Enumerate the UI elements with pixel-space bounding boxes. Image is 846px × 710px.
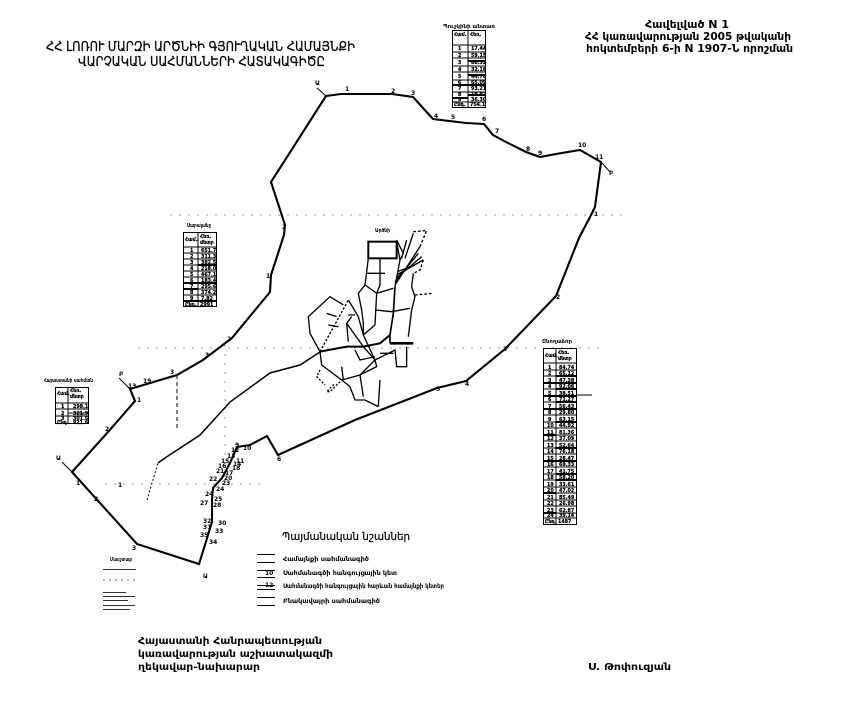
boundary point labels southwest: 22: [209, 476, 217, 483]
table: north neighbour: 2: [458, 53, 461, 59]
table: north neighbour: 6: [458, 80, 462, 86]
table: east neighbour: 39.14: [559, 513, 575, 519]
table: north neighbour: Հեռ.: [470, 32, 481, 38]
table: north neighbour: 7: [458, 86, 461, 92]
table: east neighbour: 1: [548, 365, 551, 371]
table: east neighbour: Շնողաձոր: [542, 339, 572, 345]
boundary point labels north: 2: [391, 88, 395, 95]
signatory title: [138, 636, 333, 673]
table: southwest neighbour: [44, 378, 93, 426]
boundary point labels north: 5: [451, 114, 455, 121]
signatory title: կառավարության աշխատակազմի: [138, 649, 333, 660]
table: east neighbour: [542, 339, 592, 525]
table: west neighbour: Սարալանջ: [187, 223, 211, 229]
table: north neighbour: 3: [458, 60, 461, 66]
boundary point labels southwest: 14: [233, 461, 241, 468]
table: north neighbour: 9: [458, 97, 462, 103]
boundary point labels southwest: 21: [216, 468, 224, 475]
table: east neighbour: 81.36: [559, 430, 575, 436]
table: east neighbour: 33.61: [559, 482, 574, 488]
boundary point labels north: 2: [556, 294, 560, 301]
table: north neighbour: 32.18: [471, 67, 487, 73]
boundary point labels southwest: 33: [215, 528, 223, 535]
boundary point labels north: 9: [538, 150, 542, 157]
boundary point labels southwest: 10: [243, 445, 251, 452]
table: east neighbour: 41.75: [559, 469, 574, 475]
community boundary: [72, 94, 601, 564]
boundary point labels southwest: 23: [222, 480, 230, 487]
table: east neighbour: 44.92: [559, 423, 574, 429]
boundary point labels north: 4: [434, 113, 438, 120]
table: east neighbour: 10: [547, 423, 554, 429]
table: north neighbour: Ընդ.: [454, 102, 466, 108]
boundary point labels southwest: 1: [76, 480, 80, 487]
table: southwest neighbour: Հայաստանի սահման: [44, 378, 93, 384]
table: north neighbour: 93.21: [471, 86, 486, 92]
table: southwest neighbour: 298.1: [73, 404, 88, 410]
table: east neighbour: 1487: [558, 519, 571, 525]
annex note: ՀՀ կառավարության 2005 թվականի: [585, 31, 791, 43]
annex note: Հավելված N 1: [645, 19, 729, 31]
boundary point labels north: 10: [578, 142, 586, 149]
table: west neighbour: 7.82: [201, 296, 213, 302]
table: north neighbour: Պուշկինի անտառ: [443, 24, 495, 30]
boundary point labels southwest: 11: [236, 458, 244, 465]
table: west neighbour: 183.4: [201, 278, 217, 284]
table: north neighbour: 36.30: [471, 97, 487, 103]
boundary point labels southwest: 13: [227, 453, 235, 460]
table: east neighbour: 22: [547, 501, 554, 507]
table: north neighbour: [443, 24, 495, 108]
table: west neighbour: 2991: [200, 302, 213, 308]
table: east neighbour: 14: [547, 449, 554, 455]
table: east neighbour: 47.02: [559, 488, 574, 494]
signatory title: ղեկավար-նախարար: [138, 662, 260, 673]
legend: 10: [265, 570, 273, 577]
signatory name: Ս. Թոփուզյան: [588, 662, 671, 673]
table: southwest neighbour: 1: [61, 404, 64, 410]
table: east neighbour: 16: [547, 462, 554, 468]
boundary point labels north: 3: [503, 346, 507, 353]
table: east neighbour: 12: [547, 436, 554, 442]
table: west neighbour: 374.2: [201, 290, 216, 296]
table: west neighbour: 1: [190, 248, 193, 254]
boundary point labels north: 1: [266, 273, 270, 280]
boundary point labels north: 6: [277, 456, 281, 463]
table: west neighbour: 8: [190, 290, 194, 296]
table: west neighbour: Ընդ.: [185, 302, 197, 308]
table: east neighbour: 2: [548, 371, 551, 377]
table: west neighbour: Հեռ.: [200, 234, 211, 240]
boundary point labels north: 7: [495, 128, 499, 135]
boundary point labels southwest: [56, 371, 251, 580]
table: west neighbour: [183, 223, 217, 308]
table: east neighbour: 15: [547, 456, 554, 462]
table: west neighbour: Համ.: [185, 237, 198, 243]
boundary point labels north: 5: [436, 386, 440, 393]
small scale key: Մասշտաբ: [110, 557, 132, 563]
boundary point labels southwest: 30: [218, 520, 226, 527]
table: east neighbour: 52.64: [559, 443, 575, 449]
graticule lines: [105, 215, 625, 485]
table: north neighbour: 754.1: [470, 102, 485, 108]
title: ՎԱՐՉԱԿԱՆ ՍԱՀՄԱՆՆԵՐԻ ՀԱՏԱԿԱԳԻԾԸ: [78, 55, 325, 70]
table: east neighbour: 11: [547, 430, 554, 436]
table: southwest neighbour: 921.6: [73, 420, 89, 426]
annex note: հոկտեմբերի 6-ի N 1907-Ն որոշման: [586, 43, 793, 55]
table: west neighbour: 311.3: [201, 254, 216, 260]
table: east neighbour: 9: [548, 417, 552, 423]
boundary point labels southwest: 19: [143, 378, 151, 385]
table: west neighbour: 467.1: [201, 272, 216, 278]
boundary point labels southwest: Ա: [203, 573, 208, 580]
boundary point labels north: 3: [411, 90, 415, 97]
table: north neighbour: 4: [458, 67, 462, 73]
table: east neighbour: 63.15: [559, 417, 574, 423]
boundary point labels southwest: 34: [209, 539, 217, 546]
legend: Բնակավայրի սահմանագիծ: [283, 597, 380, 605]
boundary point labels north: 3: [205, 352, 209, 359]
table: north neighbour: 17.44: [471, 46, 487, 52]
boundary point labels southwest: 31: [203, 524, 211, 531]
boundary point labels southwest: 28: [213, 502, 221, 509]
table: east neighbour: 76.18: [559, 449, 575, 455]
table: east neighbour: 71.27: [559, 397, 574, 403]
boundary point labels southwest: 1: [137, 397, 141, 404]
table: east neighbour: 69.33: [559, 462, 574, 468]
boundary point labels southwest: 25: [214, 496, 222, 503]
table: east neighbour: 7: [548, 404, 551, 410]
signatory title: Հայաստանի Հանրապետության: [138, 636, 322, 647]
boundary point labels southwest: 32: [203, 518, 211, 525]
annex note: [585, 19, 793, 55]
boundary point labels north: 6: [482, 116, 486, 123]
table: north neighbour: 1: [458, 46, 461, 52]
boundary point labels southwest: 24: [205, 491, 213, 498]
boundary point labels southwest: 2: [94, 496, 98, 503]
boundary point labels southwest: 20: [224, 475, 232, 482]
table: southwest neighbour: 321.9: [73, 411, 89, 417]
table: north neighbour: Համ.: [454, 32, 467, 38]
legend: 12: [265, 582, 273, 589]
boundary point labels north: 2: [282, 224, 286, 231]
table: east neighbour: 38.51: [559, 391, 574, 397]
table: east neighbour: 4: [548, 384, 552, 390]
settlement network: [308, 231, 433, 407]
table: east neighbour: 18: [547, 475, 554, 481]
boundary point labels north: Բ: [609, 170, 613, 177]
table: east neighbour: 56.43: [559, 404, 574, 410]
table: east neighbour: 5: [548, 391, 551, 397]
title: [46, 40, 355, 70]
table: east neighbour: 28.47: [559, 456, 574, 462]
table: southwest neighbour: մետր: [70, 394, 84, 400]
table: southwest neighbour: Համ.: [57, 391, 70, 397]
table: southwest neighbour: Հեռ.: [70, 388, 81, 394]
table: west neighbour: 9: [190, 296, 194, 302]
table: west neighbour: 295.6: [201, 284, 217, 290]
table: east neighbour: 21: [547, 495, 554, 501]
table: north neighbour: 59.15: [471, 53, 486, 59]
boundary point labels north: 2: [227, 336, 231, 343]
table: east neighbour: 65.12: [559, 371, 574, 377]
table: west neighbour: 6: [190, 278, 194, 284]
table: east neighbour: 19: [547, 482, 554, 488]
table: east neighbour: 6: [548, 397, 552, 403]
table: southwest neighbour: 3: [61, 416, 64, 422]
table: east neighbour: 62.87: [559, 508, 574, 514]
table: west neighbour: 3: [190, 260, 193, 266]
table: east neighbour: մետր: [558, 356, 572, 362]
boundary point labels southwest: 18: [232, 465, 240, 472]
title: ՀՀ ԼՈՌՈՒ ՄԱՐԶԻ ԱՐԾՆԻԻ ԳՅՈՒՂԱԿԱՆ ՀԱՄԱՅՆՔԻ: [46, 40, 355, 55]
boundary point labels north: 4: [465, 381, 469, 388]
table: west neighbour: մետր: [200, 240, 214, 246]
settlement label: Արծնի: [375, 228, 390, 234]
boundary point labels southwest: 16: [218, 463, 226, 470]
table: east neighbour: 26.98: [559, 501, 575, 507]
boundary point labels north: 1: [345, 86, 349, 93]
boundary point labels north: 8: [526, 146, 530, 153]
boundary point labels north: 11: [595, 154, 603, 161]
boundary point labels southwest: 12: [231, 447, 239, 454]
table: east neighbour: 58.20: [559, 475, 575, 481]
table: north neighbour: 5: [458, 74, 461, 80]
boundary point labels north: 1: [594, 211, 598, 218]
table: east neighbour: 24: [547, 513, 554, 519]
table: east neighbour: 13: [547, 443, 554, 449]
table: west neighbour: 5: [190, 272, 193, 278]
boundary point labels southwest: 24: [216, 486, 224, 493]
boundary point labels southwest: 3: [132, 545, 136, 552]
table: west neighbour: 2: [190, 254, 193, 260]
boundary point labels southwest: Ա: [56, 455, 61, 462]
table: east neighbour: 20: [547, 488, 554, 494]
table: east neighbour: 85.49: [559, 495, 575, 501]
table: east neighbour: 3: [548, 378, 551, 384]
table: east neighbour: Հեռ.: [558, 350, 569, 356]
internal road: [147, 352, 320, 500]
table: east neighbour: 92.06: [559, 384, 575, 390]
boundary point labels north: Ա: [315, 80, 320, 87]
legend: Պայմանական նշաններ: [282, 531, 410, 543]
table: east neighbour: Ընդ.: [545, 519, 557, 525]
table: southwest neighbour: Ընդ.: [57, 420, 69, 426]
table: east neighbour: 23: [547, 508, 554, 514]
boundary point labels southwest: 27: [200, 500, 208, 507]
legend: Սահմանագծի հանգույցային հարևան համայնքի կետեր: [283, 582, 444, 590]
boundary point labels north: [170, 80, 613, 463]
table: east neighbour: 29.80: [559, 410, 575, 416]
table: southwest neighbour: 301.5: [73, 416, 88, 422]
table: west neighbour: 651.7: [201, 248, 216, 254]
small scale key: [103, 557, 136, 610]
boundary point labels southwest: 2: [105, 426, 109, 433]
table: east neighbour: 47.38: [559, 378, 575, 384]
table: north neighbour: 18.87: [471, 92, 486, 98]
boundary point labels southwest: 13: [128, 383, 136, 390]
table: east neighbour: 8: [548, 410, 552, 416]
table: west neighbour: 7: [190, 284, 193, 290]
table: east neighbour: 17: [547, 469, 554, 475]
table: west neighbour: 4: [190, 266, 194, 272]
table: southwest neighbour: 2: [61, 411, 64, 417]
boundary point labels southwest: 1: [118, 482, 122, 489]
boundary point labels southwest: 35: [200, 532, 208, 539]
table: east neighbour: 84.74: [559, 365, 575, 371]
table: east neighbour: 37.09: [559, 436, 575, 442]
table: west neighbour: 218.0: [201, 266, 217, 272]
boundary point labels southwest: 15: [221, 458, 229, 465]
table: north neighbour: 8: [458, 92, 462, 98]
legend: Սահմանագծի հանգույցային կետ: [283, 569, 397, 577]
boundary point labels southwest: Բ: [119, 371, 123, 378]
boundary point labels southwest: 9: [235, 442, 239, 449]
legend: [257, 531, 444, 606]
table: west neighbour: 382.5: [201, 260, 216, 266]
table: north neighbour: 88.32: [471, 60, 486, 66]
legend: Համայնքի սահմանագիծ: [283, 555, 369, 563]
boundary point labels southwest: 17: [225, 470, 233, 477]
table: east neighbour: Համ.: [545, 353, 558, 359]
table: north neighbour: 65.09: [471, 80, 487, 86]
boundary point labels north: 3: [170, 369, 174, 376]
table: north neighbour: 44.76: [471, 74, 487, 80]
